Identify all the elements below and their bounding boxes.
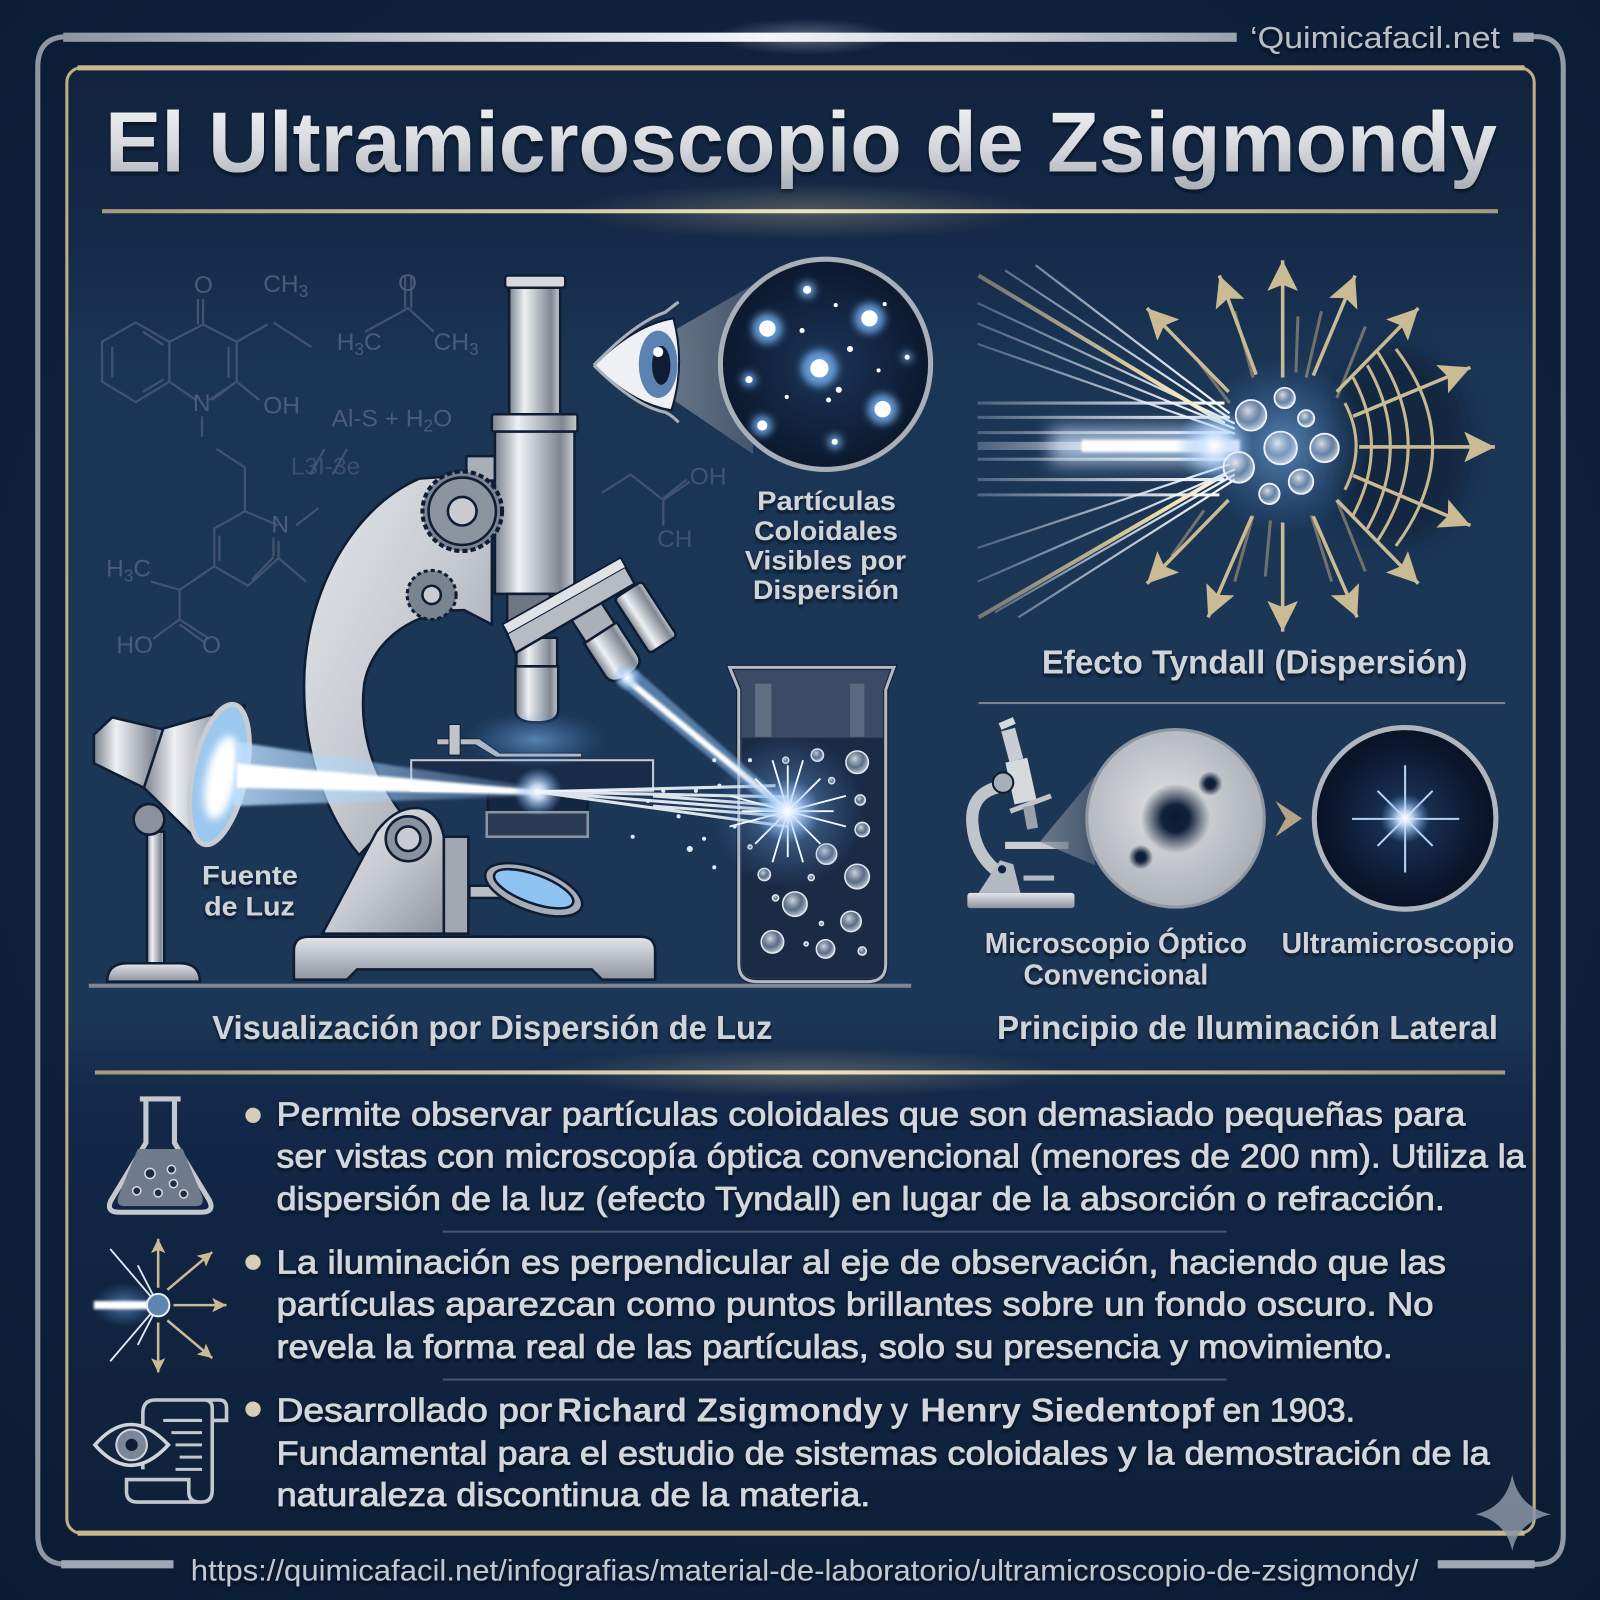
bullet text 2: revela la forma real de las partículas, solo su presencia y movimiento. <box>277 1329 1393 1366</box>
label: particulas coloidales: Dispersión <box>753 575 899 605</box>
large focus knob <box>422 471 502 551</box>
shelf line <box>89 984 911 988</box>
microscope <box>294 276 677 980</box>
light beam <box>233 663 796 827</box>
arm <box>304 473 492 855</box>
comparison: conventional view circle <box>1040 730 1264 907</box>
bullet text 3 <box>277 1392 1490 1514</box>
icon: sparkle watermark <box>1476 1474 1551 1551</box>
bullet 3 <box>245 1392 1490 1514</box>
molecule labels: H <box>337 329 354 356</box>
molecule labels: O <box>433 406 452 433</box>
molecule labels: C <box>364 329 382 356</box>
molecule labels <box>106 270 726 659</box>
molecule labels: 3 <box>299 281 308 301</box>
molecule labels: H <box>106 556 124 583</box>
secondary faint rays <box>1171 311 1365 582</box>
bullet text 2: partículas aparezcan como puntos brillantes sobre un fondo oscuro. No <box>277 1286 1434 1323</box>
label: particulas coloidales: Partículas <box>757 486 896 516</box>
icon: eye looking through lens <box>594 285 753 454</box>
icon: scattering star <box>92 1239 227 1372</box>
footer url: https://quimicafacil.net/infografias/material-de-laboratorio/ultramicroscopio-de-zsigmondy/ <box>191 1555 1419 1588</box>
label: particulas coloidales: Visibles por <box>745 545 906 575</box>
bullet text 3: Desarrollado por <box>277 1392 552 1429</box>
bullet divider 2 <box>443 1379 1227 1381</box>
scattering arrows <box>1147 260 1495 632</box>
stage <box>411 724 653 837</box>
bullet text 2 <box>277 1244 1446 1366</box>
incoming light rays <box>978 265 1235 617</box>
small focus knob <box>407 570 456 619</box>
central bright beam <box>978 407 1253 485</box>
icon: small microscope <box>967 720 1074 908</box>
label: particulas coloidales <box>745 486 906 605</box>
label: conventional microscope: Convencional <box>1023 960 1208 992</box>
title underline <box>102 183 1498 240</box>
bullet text 1: Permite observar partículas coloidales que son demasiado pequeñas para <box>277 1097 1466 1134</box>
bullet 2 <box>245 1244 1446 1366</box>
colloid droplets <box>1223 388 1339 504</box>
caption: light scattering: Visualización por Dispersión de Luz <box>212 1010 772 1047</box>
bullet text 3: Henry Siedentopf <box>920 1392 1215 1429</box>
base <box>294 808 655 980</box>
label: particulas coloidales: Coloidales <box>754 516 898 546</box>
molecule labels: O <box>398 270 417 297</box>
diagram: tyndall effect <box>978 260 1495 632</box>
bullet text 3: en 1903. <box>1222 1392 1355 1429</box>
bullet text 3: Fundamental para el estudio de sistemas coloidales y la demostración de la <box>277 1435 1490 1472</box>
label: conventional microscope: Microscopio Óptico <box>985 926 1247 960</box>
molecule labels: CH <box>434 329 469 356</box>
faint chemical structures <box>102 270 726 659</box>
wave arcs <box>1345 349 1433 546</box>
beaker with colloid <box>730 667 894 982</box>
molecule labels: 3 <box>469 339 479 359</box>
caption: lateral illumination: Principio de Iluminación Lateral <box>997 1010 1498 1047</box>
comparison: ultramicroscope view circle <box>1314 728 1496 909</box>
bullet text 1: ser vistas con microscopía óptica convencional (menores de 200 nm). Utiliza la <box>277 1138 1526 1175</box>
molecule labels: OH <box>263 392 300 419</box>
molecule labels: N <box>193 390 211 417</box>
site label: ‘Quimicafacil.net <box>1250 21 1501 55</box>
eyepiece tube <box>466 276 578 624</box>
bullet text 1: dispersión de la luz (efecto Tyndall) en lugar de la absorción o refracción. <box>277 1181 1445 1218</box>
molecule labels: CH <box>657 526 692 553</box>
molecule labels: OH <box>690 464 726 491</box>
section divider <box>979 702 1505 704</box>
molecule labels: O <box>194 272 213 299</box>
molecule labels: HO <box>116 632 153 659</box>
label: ultramicroscope: Ultramicroscopio <box>1282 928 1514 960</box>
lamp <box>94 699 260 982</box>
nosepiece and objectives <box>503 558 677 722</box>
molecule labels: O <box>202 632 221 659</box>
title: El Ultramicroscopio de Zsigmondy <box>105 94 1497 190</box>
molecule labels: 2 <box>423 416 433 436</box>
lower section rule <box>95 1048 1505 1097</box>
mirror <box>469 852 589 927</box>
bullet text 2: La iluminación es perpendicular al eje de observación, haciendo que las <box>277 1244 1446 1281</box>
icon: scroll with eye <box>95 1400 227 1502</box>
molecule labels: L3I-3e <box>291 453 360 480</box>
label: conventional microscope <box>985 926 1247 992</box>
bullet 1 <box>245 1097 1526 1218</box>
bullet text 3: y <box>891 1392 908 1429</box>
magnified circle with bright particles <box>720 259 931 469</box>
bullet text 3: naturaleza discontinua de la materia. <box>277 1477 870 1514</box>
bullet text 3: Richard Zsigmondy <box>557 1392 883 1429</box>
label: fuente de luz: de Luz <box>204 891 295 921</box>
arrow: chevron <box>1276 801 1302 837</box>
label: fuente de luz: Fuente <box>202 861 298 891</box>
label: fuente de luz <box>202 861 298 921</box>
molecule labels: C <box>133 556 151 583</box>
bullet text 1 <box>277 1097 1526 1218</box>
bullet divider 1 <box>443 1231 1227 1233</box>
molecule labels: 3 <box>124 566 133 586</box>
molecule labels: 3 <box>354 339 364 359</box>
icon: flask <box>109 1099 211 1212</box>
molecule labels: CH <box>263 271 299 298</box>
molecule labels: N <box>271 512 289 539</box>
molecule labels: Al-S + H <box>332 406 423 433</box>
label: efecto tyndall: Efecto Tyndall (Dispersión) <box>1042 644 1467 681</box>
suspended particles <box>748 749 869 958</box>
scattering sparkle <box>631 735 864 888</box>
